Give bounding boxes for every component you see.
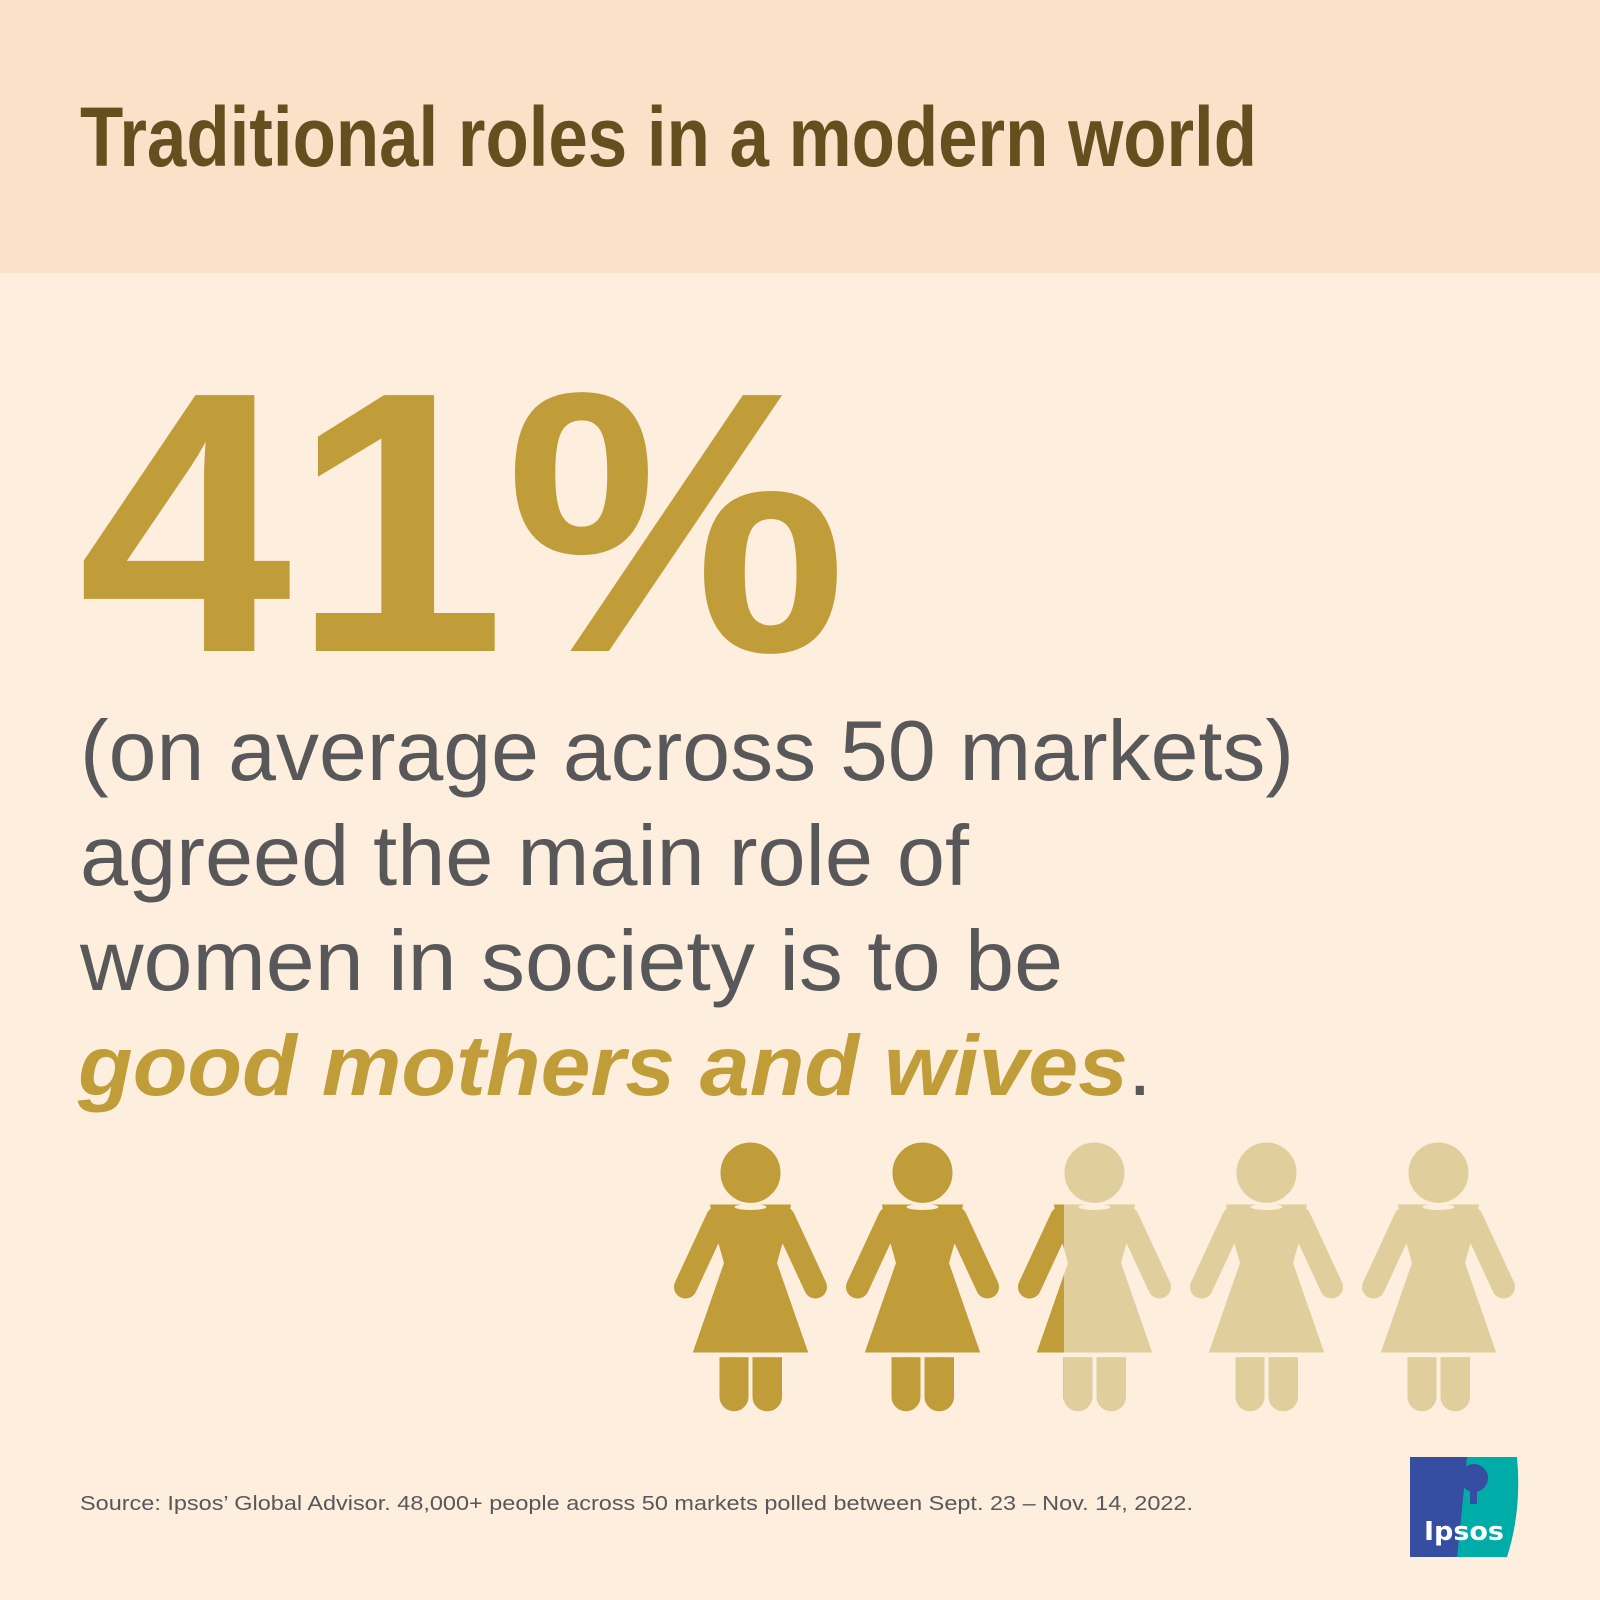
- logo: Ipsos: Ipsos: [1424, 1517, 1504, 1547]
- body text: (on average across 50 markets): [80, 704, 1294, 799]
- body text: women in society is to be: [79, 914, 1063, 1009]
- body text: good mothers and wives .: [77, 1019, 1152, 1114]
- source note: Source: Ipsos’ Global Advisor. 48,000+ people across 50 markets polled between Sept. 23 – Nov. 14, 2022.: [80, 1493, 1193, 1515]
- pictogram: 5 women figures, 41% filled: [686, 1143, 1504, 1411]
- logo: Ipsos: [1410, 1457, 1518, 1557]
- body text: agreed the main role of: [80, 809, 969, 904]
- title: Traditional roles in a modern world: [80, 90, 1257, 184]
- body text: [77, 704, 1294, 1114]
- header band: [0, 0, 1600, 273]
- big statistic 41%: 41%: [78, 314, 847, 730]
